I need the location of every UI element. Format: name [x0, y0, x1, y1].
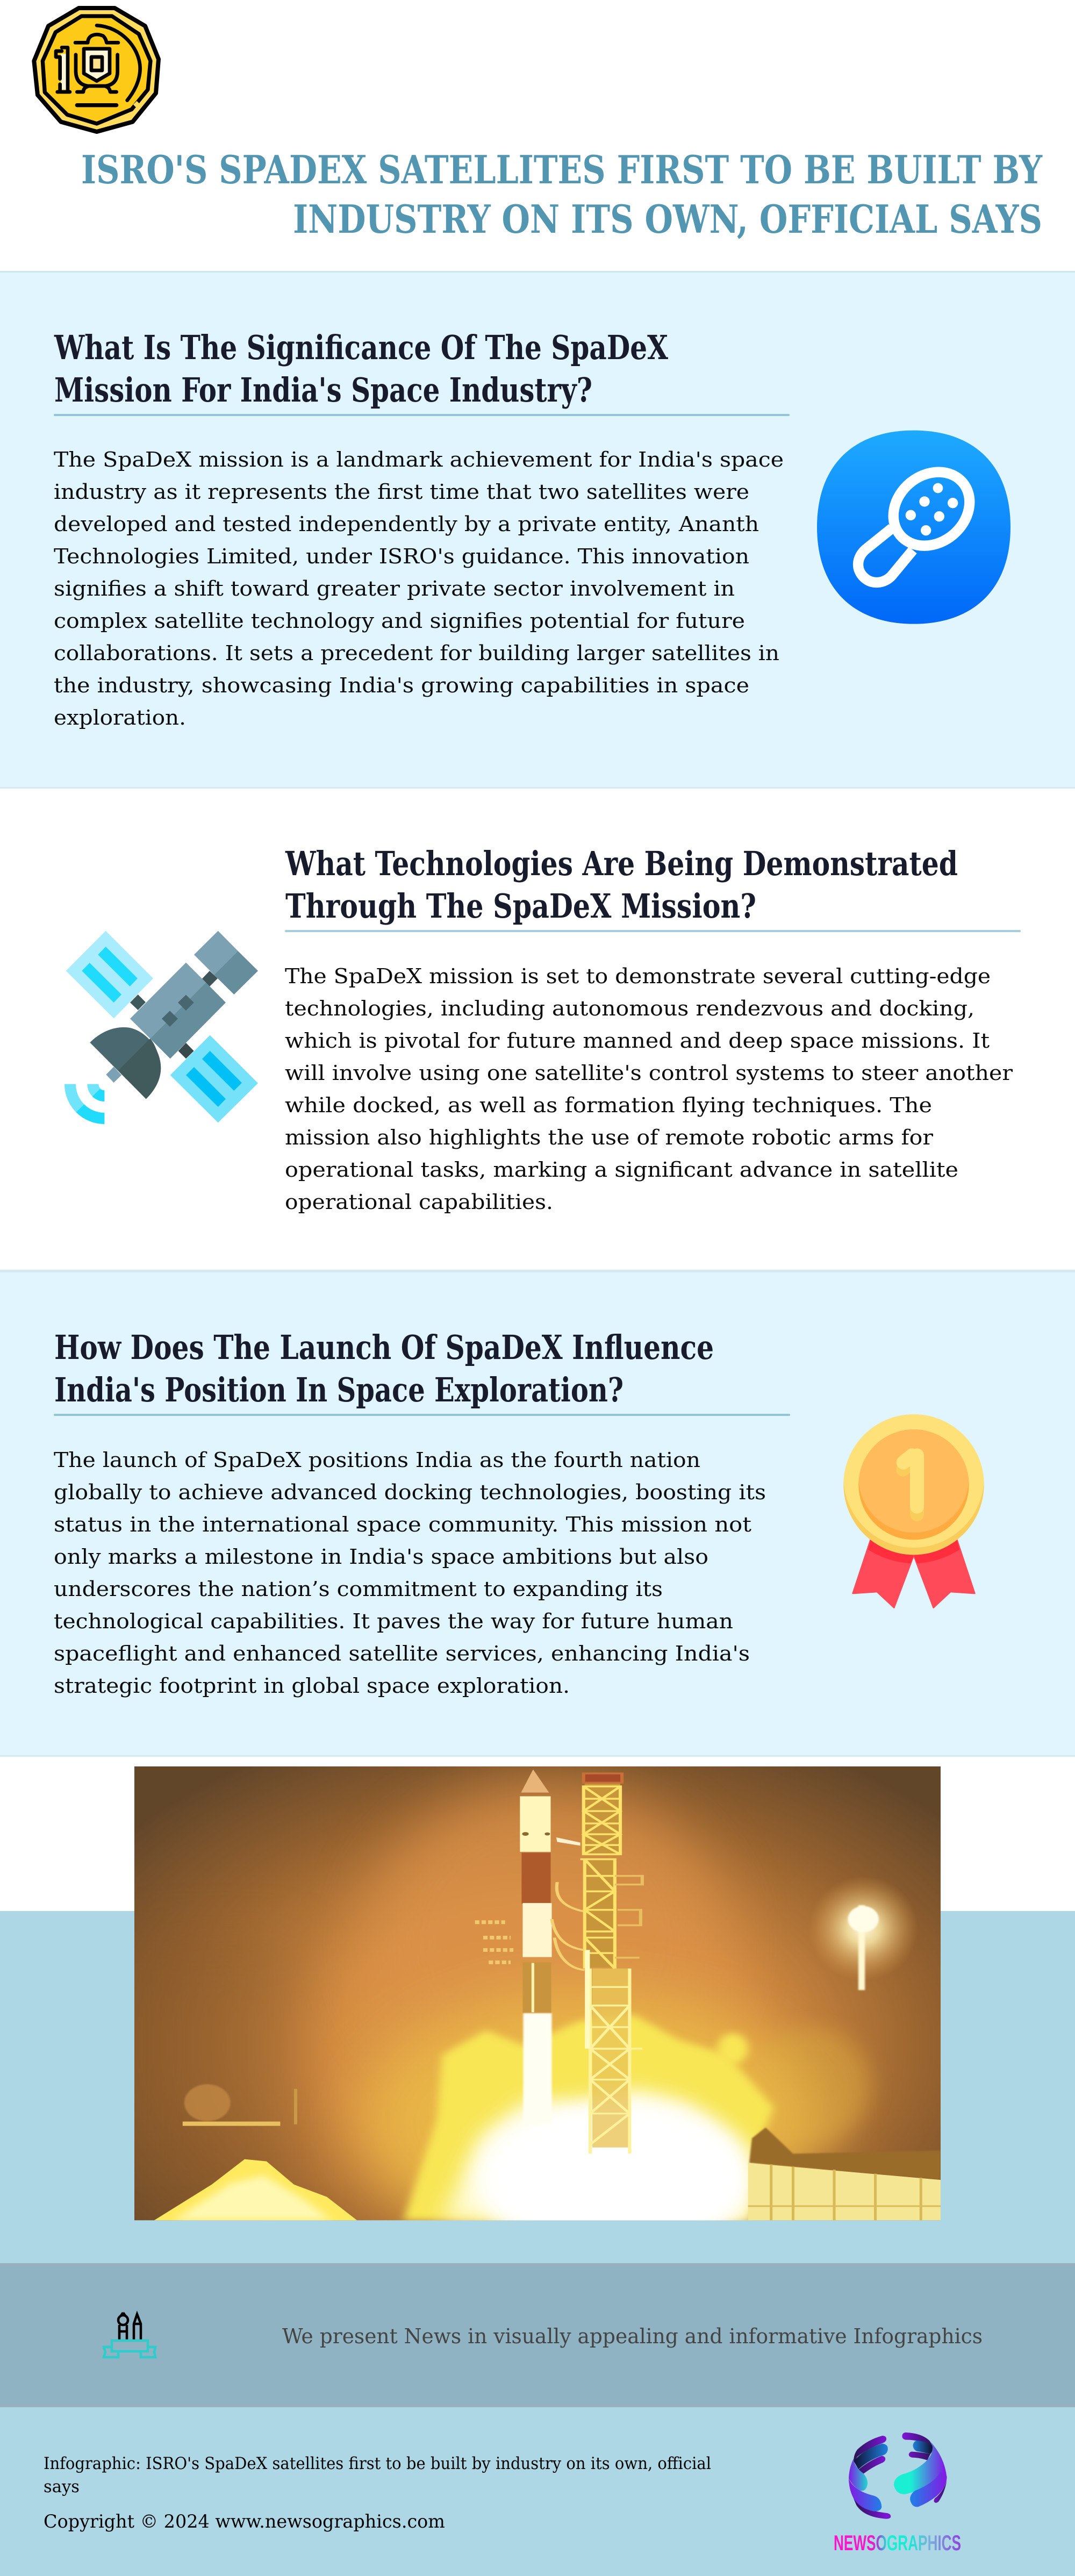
heading: significance: What Is The Significance Of The SpaDeX — [54, 328, 669, 367]
text block: influence: The launch of SpaDeX positions India as the fourth nation — [54, 1448, 700, 1472]
text block: significance: developed and tested independently by a private entity, Ananth — [54, 512, 759, 536]
text block: influence: technological capabilities. It paves the way for future human — [54, 1609, 733, 1634]
icon: gold medal — [843, 1414, 984, 1608]
text block: influence: underscores the nation’s commitment to expanding its — [54, 1577, 663, 1601]
text block: significance: signifies a shift toward greater private sector involvement in — [54, 577, 735, 601]
text block: technologies: while docked, as well as formation flying techniques. The — [285, 1093, 932, 1118]
text block: technologies: will involve using one satellite's control systems to steer another — [285, 1061, 1013, 1085]
text block: credits: Infographic: ISRO's SpaDeX satellites first to be built by industry on its own, official — [44, 2454, 711, 2473]
heading: influence: India's Position In Space Exploration? — [54, 1370, 624, 1409]
foreground mound — [154, 2159, 357, 2220]
text: brand name: NEWSOGRAPHICS — [834, 2531, 961, 2555]
band: tagline — [0, 2263, 1075, 2407]
text block: credits: Copyright © 2024 www.newsographics.com — [44, 2511, 445, 2532]
heading: significance — [54, 328, 669, 410]
rocket — [520, 1770, 580, 2124]
text block: technologies: operational capabilities. — [285, 1190, 553, 1214]
text block: significance: complex satellite technology and signifies potential for future — [54, 609, 745, 633]
heading: influence — [54, 1328, 714, 1409]
title — [81, 147, 1043, 242]
text block: technologies: which is pivotal for future manned and deep space missions. It — [285, 1029, 990, 1053]
photo: rocket launch — [134, 1766, 941, 2259]
text block: technologies: mission also highlights the use of remote robotic arms for — [285, 1126, 934, 1150]
floodlight — [815, 1880, 914, 1991]
panel: significance — [0, 271, 1075, 789]
text block: significance: exploration. — [54, 706, 186, 730]
text block: influence — [54, 1448, 766, 1698]
icon: satellite — [64, 931, 258, 1124]
heading: significance: Mission For India's Space Industry? — [54, 370, 592, 410]
pad building — [748, 2128, 941, 2220]
text block: influence: only marks a milestone in India's space ambitions but also — [54, 1545, 708, 1569]
text block: technologies: technologies, including autonomous rendezvous and docking, — [285, 997, 974, 1021]
icon: globe hands — [849, 2432, 947, 2519]
text block: technologies: operational tasks, marking a significant advance in satellite — [285, 1158, 958, 1182]
text block: technologies: The SpaDeX mission is set to demonstrate several cutting-edge — [285, 964, 991, 989]
text block: significance: the industry, showcasing India's growing capabilities in space — [54, 674, 749, 698]
text block: influence: status in the international space community. This mission not — [54, 1513, 752, 1537]
heading: technologies — [285, 844, 958, 926]
text block: credits: says — [44, 2477, 80, 2496]
text block: influence: strategic footprint in global space exploration. — [54, 1674, 570, 1698]
text block: technologies — [285, 964, 1013, 1214]
logo: newsographics — [834, 2432, 961, 2555]
panel: technologies — [0, 844, 1075, 1271]
icon: magnifier squircle — [817, 431, 1010, 624]
text block: significance: collaborations. It sets a precedent for building larger satellites in — [54, 641, 779, 666]
heading: technologies: Through The SpaDeX Mission? — [285, 886, 756, 926]
text block: credits — [44, 2454, 711, 2532]
text block: significance — [54, 448, 784, 730]
text block: significance: industry as it represents the first time that two satellites were — [54, 480, 749, 504]
smoke cloud — [360, 1993, 821, 2259]
text block: significance: The SpaDeX mission is a landmark achievement for India's space — [54, 448, 784, 472]
text: tagline: We present News in visually appealing and informative Infographics — [282, 2324, 983, 2348]
icon: coin logo — [34, 8, 159, 132]
launch tower — [475, 1773, 642, 2153]
panel: influence — [0, 1271, 1075, 1757]
tree and platform — [183, 2084, 297, 2126]
text block: influence: globally to achieve advanced docking technologies, boosting its — [54, 1480, 766, 1505]
text block: significance: Technologies Limited, under ISRO's guidance. This innovation — [54, 545, 749, 569]
footer background — [0, 1911, 1075, 2576]
text block: influence: spaceflight and enhanced satellite services, enhancing India's — [54, 1642, 750, 1666]
icon: pens on ribbon — [104, 2313, 155, 2357]
heading: influence: How Does The Launch Of SpaDeX Influence — [54, 1328, 714, 1367]
